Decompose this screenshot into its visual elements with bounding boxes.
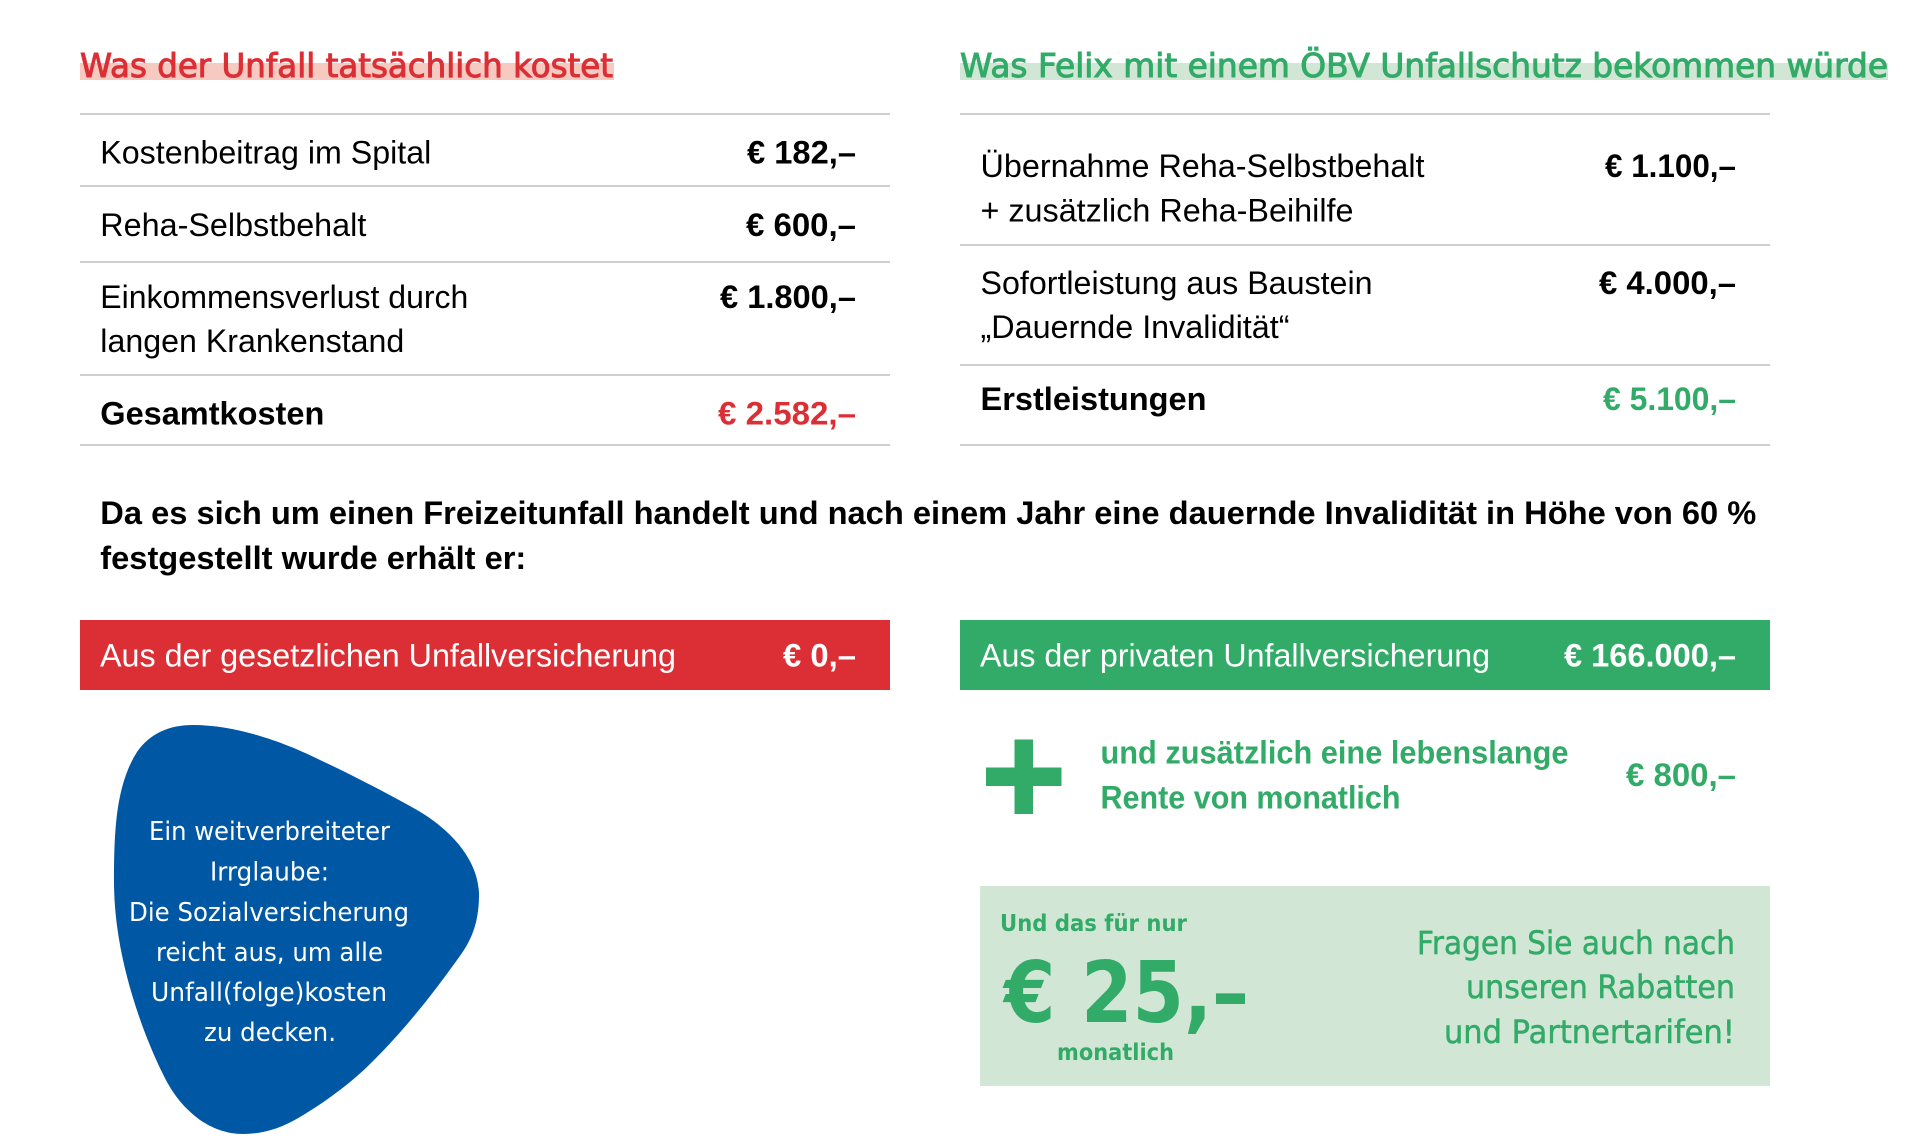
row: hospital fee	[100, 135, 856, 171]
banner: statutory accident insurance: € 0,–	[783, 638, 856, 674]
row: total costs	[100, 395, 856, 431]
heading: what Felix would get: Was Felix mit einem ÖBV Unfallschutz bekommen würde	[960, 45, 1888, 85]
row: rehab deductible	[100, 207, 856, 243]
discount note: Fragen Sie auch nach	[1417, 924, 1735, 962]
row: initial benefits	[980, 381, 1736, 417]
callout: common misconception blob: Irrglaube:	[210, 858, 329, 888]
row: rehab deductible: Reha-Selbstbehalt	[100, 207, 366, 243]
row: rehab coverage: + zusätzlich Reha-Beihilfe	[980, 193, 1354, 229]
banner: private accident insurance	[960, 620, 1770, 690]
row: immediate payment	[980, 265, 1736, 345]
banner: statutory accident insurance	[80, 620, 890, 690]
banner: private accident insurance: Aus der privaten Unfallversicherung	[980, 638, 1490, 674]
callout: common misconception blob: reicht aus, um alle	[156, 938, 383, 968]
discount note: unseren Rabatten	[1466, 968, 1735, 1006]
lifelong pension row: Rente von monatlich	[1100, 780, 1400, 816]
discount note	[1417, 924, 1735, 1051]
panel: actual accident costs	[80, 46, 890, 446]
row: hospital fee: Kostenbeitrag im Spital	[100, 135, 431, 171]
banner: private accident insurance: € 166.000,–	[1564, 638, 1736, 674]
lifelong pension row	[986, 735, 1736, 816]
callout: common misconception blob: Die Sozialversicherung	[129, 898, 409, 928]
price amount: € 25,–	[1002, 944, 1249, 1043]
row: loss of income: langen Krankenstand	[100, 323, 404, 359]
text block: leisure accident statement	[100, 495, 1756, 576]
row: total costs: € 2.582,–	[718, 395, 856, 431]
row: rehab coverage: Übernahme Reha-Selbstbehalt	[980, 148, 1425, 184]
heading: what the accident costs: Was der Unfall tatsächlich kostet	[80, 46, 613, 85]
row: loss of income	[100, 279, 856, 359]
row: hospital fee: € 182,–	[747, 135, 856, 171]
text block: leisure accident statement: Da es sich um einen Freizeitunfall handelt und nach einem Jahr eine dauernde Invalidität in Höhe von 60 %	[100, 495, 1756, 531]
icon: plus	[986, 740, 1062, 814]
callout: common misconception blob: Ein weitverbreiteter	[149, 817, 390, 847]
panel: price box	[980, 886, 1770, 1086]
lifelong pension row: € 800,–	[1626, 757, 1736, 793]
row: loss of income: € 1.800,–	[720, 279, 856, 315]
row: total costs: Gesamtkosten	[100, 395, 324, 431]
banner: statutory accident insurance: Aus der gesetzlichen Unfallversicherung	[100, 638, 676, 674]
callout: common misconception blob	[114, 725, 479, 1134]
row: rehab coverage: € 1.100,–	[1605, 148, 1736, 184]
callout: common misconception blob: zu decken.	[204, 1018, 336, 1048]
callout: common misconception blob: Unfall(folge)kosten	[151, 978, 387, 1008]
row: initial benefits: Erstleistungen	[980, 381, 1206, 417]
panel: benefits with ÖBV accident protection	[960, 45, 1888, 446]
row: rehab deductible: € 600,–	[746, 207, 856, 243]
row: immediate payment: Sofortleistung aus Baustein	[980, 265, 1372, 301]
discount note: und Partnertarifen!	[1444, 1013, 1735, 1051]
price label: Und das für nur	[1000, 909, 1187, 937]
row: initial benefits: € 5.100,–	[1603, 381, 1736, 417]
text block: leisure accident statement: festgestellt wurde erhält er:	[100, 540, 526, 576]
price unit: monatlich	[1057, 1038, 1174, 1066]
lifelong pension row: und zusätzlich eine lebenslange	[1100, 735, 1568, 771]
row: immediate payment: „Dauernde Invalidität“	[980, 309, 1290, 345]
row: immediate payment: € 4.000,–	[1599, 265, 1736, 301]
row: loss of income: Einkommensverlust durch	[100, 279, 468, 315]
row: rehab coverage	[980, 148, 1736, 229]
